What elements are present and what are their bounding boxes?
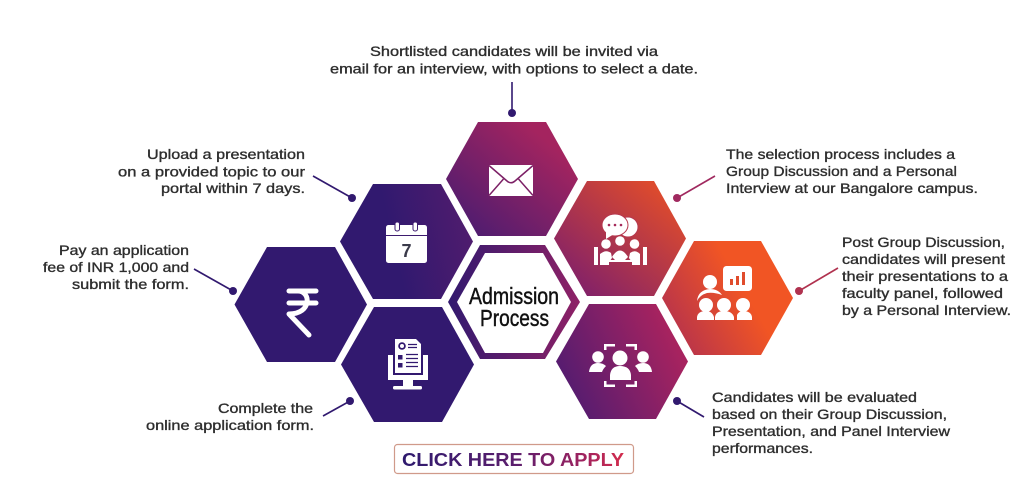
icon: people in focus frame xyxy=(589,344,652,387)
connector: upload text to calendar hexagon xyxy=(313,176,356,202)
hexagon: centre ring with title xyxy=(448,245,580,359)
button: click here to apply: CLICK HERE TO APPLY xyxy=(402,449,625,470)
text: upload presentation xyxy=(118,146,305,196)
text: complete application form: online application form. xyxy=(146,417,314,433)
connector: evaluation text to evaluation hexagon xyxy=(673,397,704,417)
text: post group discussion: candidates will present xyxy=(842,251,1005,267)
text: complete application form xyxy=(146,400,314,433)
icon: envelope xyxy=(489,165,533,196)
text: post group discussion xyxy=(842,234,1011,318)
title: Process xyxy=(480,305,549,331)
text: application fee xyxy=(43,242,189,292)
text: interview invitation: email for an interview, with options to select a date. xyxy=(330,60,698,76)
icon: calendar: 7 xyxy=(401,241,412,261)
icon: discussion group xyxy=(594,214,647,265)
text: selection process: The selection process includes a xyxy=(726,146,955,162)
text: application fee: submit the form. xyxy=(72,276,189,292)
text: post group discussion: faculty panel, followed xyxy=(842,285,1003,301)
text: evaluation: performances. xyxy=(712,440,813,456)
hexagon: online form xyxy=(341,307,474,422)
connector: form text to form hexagon xyxy=(323,397,354,416)
icon: rupee xyxy=(289,291,316,335)
text: selection process: Group Discussion and a Personal xyxy=(726,163,957,179)
text: evaluation: based on their Group Discussion, xyxy=(712,406,947,422)
text: evaluation: Presentation, and Panel Interview xyxy=(712,423,951,439)
connector: selection text to group hexagon xyxy=(673,176,715,202)
text: upload presentation: portal within 7 days. xyxy=(161,180,305,196)
title xyxy=(469,283,559,331)
hexagon: evaluation xyxy=(556,304,688,419)
title: Admission xyxy=(469,283,559,309)
hexagon: calendar xyxy=(340,184,473,299)
icon: presentation audience xyxy=(697,266,752,320)
text: application fee: fee of INR 1,000 and xyxy=(43,259,189,275)
hexagon: group discussion xyxy=(554,181,686,296)
connector: fee text to rupee hexagon xyxy=(194,269,237,295)
text: upload presentation: Upload a presentation xyxy=(147,146,305,162)
text: complete application form: Complete the xyxy=(218,400,313,416)
text: post group discussion: their presentations to a xyxy=(842,268,1008,284)
text: interview invitation: Shortlisted candidates will be invited via xyxy=(370,43,658,59)
text: interview invitation xyxy=(330,43,698,76)
hexagon: rupee fee xyxy=(234,247,367,362)
button: click here to apply xyxy=(394,444,634,474)
text: evaluation: Candidates will be evaluated xyxy=(712,389,917,405)
text: selection process xyxy=(726,146,978,196)
text: evaluation xyxy=(712,389,951,456)
text: upload presentation: on a provided topic to our xyxy=(118,164,305,180)
hexagon: email xyxy=(446,122,578,236)
connector: post discussion text to presentation hexagon xyxy=(795,268,838,295)
text: post group discussion: by a Personal Interview. xyxy=(842,302,1011,318)
text: application fee: Pay an application xyxy=(59,242,189,258)
icon: form on monitor xyxy=(388,339,428,390)
hexagon: faculty presentation xyxy=(662,241,793,355)
text: post group discussion: Post Group Discussion, xyxy=(842,234,1005,250)
connector: interview text to email hexagon xyxy=(508,82,516,117)
text: selection process: Interview at our Bangalore campus. xyxy=(726,180,978,196)
